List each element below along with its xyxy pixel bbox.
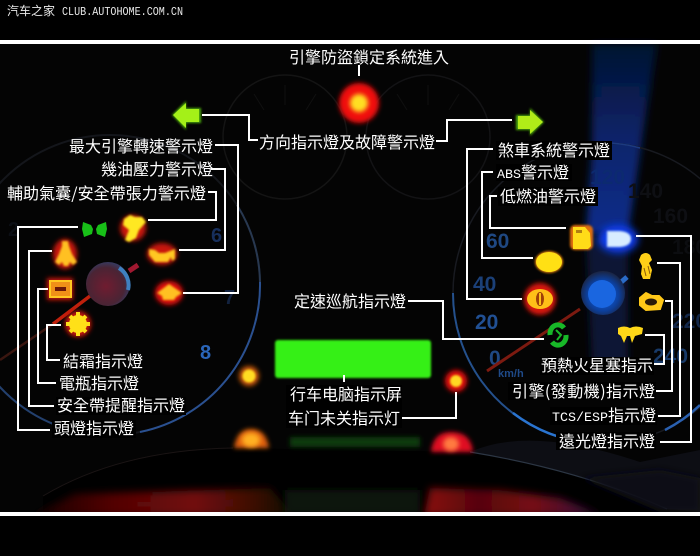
amber indicator and reflection: [234, 366, 269, 448]
label: headlight: 頭燈指示燈: [54, 415, 134, 439]
label: low fuel: 低燃油警示燈: [500, 183, 596, 207]
label: trip computer: 行车电脑指示屏: [290, 381, 402, 405]
dashboard photo: 120: [590, 166, 625, 189]
dashboard photo: 40: [473, 273, 496, 296]
label: oil pressure: 幾油壓力警示燈: [101, 156, 213, 180]
dashboard photo: 20: [475, 311, 498, 334]
header watermark: 汽车之家: [7, 2, 55, 19]
icon: cruise green: [550, 325, 566, 345]
label: engine: 引擎(發動機)指示燈: [512, 378, 655, 402]
icon: left turn arrow: [172, 101, 201, 130]
dashboard photo: 140: [628, 180, 663, 203]
left instrument hub: [86, 262, 130, 306]
icon: brake: [524, 283, 556, 315]
door ajar light and reflection: [431, 370, 473, 452]
bottom white rule: [0, 512, 700, 516]
icon: immobiliser red light: [339, 83, 379, 123]
dashboard photo: 7: [224, 287, 235, 309]
label: immobiliser: 引擎防盜鎖定系統進入: [289, 44, 449, 68]
icon: high beam: [598, 225, 638, 253]
dashboard photo: 60: [486, 230, 509, 253]
label: glow plug: 預熱火星塞指示: [541, 352, 653, 376]
label backgrounds: [52, 141, 657, 450]
leader lines: [18, 65, 691, 442]
icon: right turn arrow: [516, 108, 544, 136]
label: door ajar: 车门未关指示灯: [288, 405, 400, 429]
label: seat belt: 安全帶提醒指示燈: [57, 392, 185, 416]
icon: seat belt: [53, 239, 77, 269]
dashboard photo: 0: [489, 347, 501, 370]
dashboard photo: km/h: [498, 368, 524, 380]
dashboard photo: 6: [211, 225, 222, 247]
icon: engine: [640, 293, 663, 310]
dashboard photo: 8: [200, 342, 211, 364]
header watermark: CLUB.AUTOHOME.COM.CN: [62, 6, 183, 19]
icon: airbag: [120, 215, 146, 242]
icon: glow seat: [639, 253, 652, 279]
label: defrost: 結霜指示燈: [63, 348, 143, 372]
icon: ABS: [535, 251, 563, 273]
label: cruise control: 定速巡航指示燈: [294, 288, 406, 312]
label: ABS: ABS警示燈: [497, 159, 569, 183]
top white rule: [0, 40, 700, 44]
dashboard photo: 240: [653, 345, 688, 368]
label: battery: 電瓶指示燈: [59, 370, 139, 394]
icon: oil pressure: [147, 243, 177, 265]
icon: master warning: [155, 281, 183, 305]
label: airbag: 輔助氣囊/安全帶張力警示燈: [7, 180, 206, 204]
icon: glow plug: [618, 326, 643, 343]
label: high beam: 遠光燈指示燈: [559, 428, 655, 452]
header watermark: [7, 2, 183, 19]
icon: battery: [47, 278, 73, 300]
dashboard photo: 2: [8, 219, 19, 241]
label: turn signal: 方向指示燈及故障警示燈: [259, 129, 435, 153]
icon: defrost: [65, 311, 91, 337]
label: max rpm: 最大引擎轉速警示燈: [69, 133, 213, 157]
right instrument hub: [581, 271, 625, 315]
icon: fuel: [570, 225, 593, 250]
label: TCS/ESP: TCS/ESP指示燈: [552, 402, 656, 426]
LCD trip computer screen: [275, 340, 431, 378]
dashboard photo: 160: [653, 205, 688, 228]
label: brake system: 煞車系統警示燈: [498, 137, 610, 161]
icon: headlight indicator green: [82, 222, 107, 237]
